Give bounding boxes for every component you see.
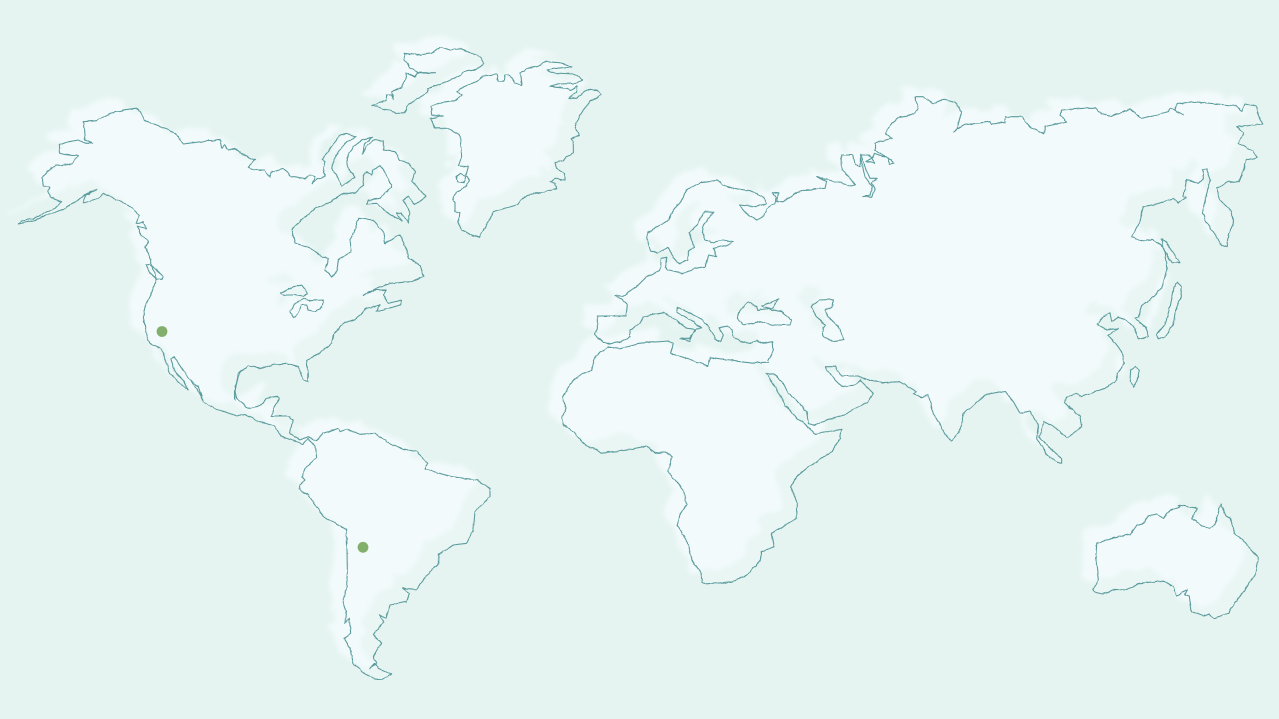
outline: Ellesmere Island	[372, 47, 484, 113]
outline: Caspian Sea	[811, 299, 844, 342]
location marker: northern Chile / Bolivia	[358, 542, 368, 553]
outline: Taiwan	[1130, 366, 1139, 387]
outline: Lake Superior	[280, 286, 307, 297]
outline: Lakes Michigan and Huron	[290, 298, 323, 317]
outline: Japan	[1157, 282, 1182, 339]
outline: Central and South America	[190, 370, 490, 679]
outline: Asia and Arabia	[767, 97, 1263, 463]
outline: Europe	[595, 176, 855, 361]
outline: Africa	[562, 341, 842, 584]
outline: North America	[18, 109, 426, 400]
outline: Black Sea	[737, 299, 792, 325]
outline: Greenland	[431, 62, 602, 237]
outline: Vancouver Island	[146, 264, 163, 279]
location marker: California	[157, 326, 167, 337]
outline: Australia	[1093, 504, 1258, 618]
outline: northern island	[1162, 239, 1180, 263]
